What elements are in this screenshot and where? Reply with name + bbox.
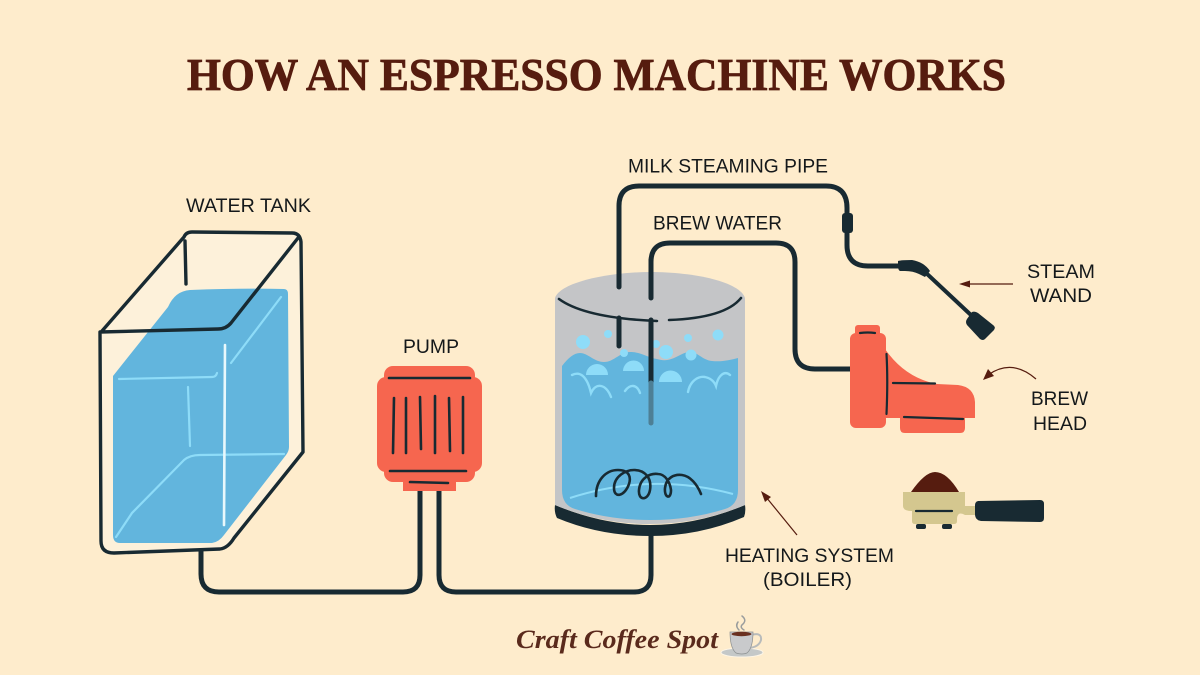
- label: steam wand: [1027, 261, 1095, 307]
- saucer: [721, 648, 763, 657]
- brew head: [850, 325, 975, 433]
- label: brew water: BREW WATER: [653, 212, 782, 234]
- icon: coffee cup: [721, 616, 763, 657]
- water floor line: [570, 484, 733, 498]
- label: heating system: [725, 545, 894, 591]
- label: heating system: HEATING SYSTEM: [725, 545, 894, 567]
- pipe connector: [842, 213, 853, 233]
- wand nozzle: [966, 312, 995, 340]
- label: steam wand: WAND: [1030, 285, 1092, 307]
- milk steaming pipe: [619, 186, 905, 288]
- label: brew head: HEAD: [1033, 413, 1087, 435]
- brew head group: [900, 416, 965, 433]
- label: steam wand: STEAM: [1027, 261, 1095, 283]
- label: milk steaming pipe: MILK STEAMING PIPE: [628, 156, 828, 178]
- arrow: steam wand: [959, 280, 1013, 288]
- basket line: [916, 510, 952, 512]
- tank water highlights: [116, 297, 284, 537]
- brew head body: [885, 349, 975, 418]
- coffee: [732, 632, 752, 636]
- handle: [975, 500, 1044, 522]
- brew head column: [850, 333, 886, 428]
- boiler water: [562, 352, 738, 520]
- pipe: pump to boiler: [439, 488, 651, 592]
- bubbles: [576, 330, 724, 382]
- boiler lid arc: [559, 298, 741, 321]
- pipe: tank to pump: [201, 488, 420, 592]
- arrow: heating system: [761, 491, 797, 535]
- water tank: [100, 232, 303, 553]
- steam: [737, 616, 745, 630]
- steam wand: [898, 260, 995, 340]
- label: water tank: WATER TANK: [186, 195, 311, 217]
- brew head lines: [860, 332, 963, 419]
- coffee grounds: [911, 472, 959, 492]
- tank outline: [100, 232, 303, 553]
- handle: [749, 634, 761, 648]
- steam swirls: [572, 373, 730, 397]
- label: pump: PUMP: [403, 336, 459, 358]
- pump: [377, 366, 482, 491]
- boiler: [555, 260, 745, 536]
- label: heating system: (BOILER): [763, 569, 852, 591]
- title: HOW AN ESPRESSO MACHINE WORKS: [187, 49, 1006, 100]
- heating coil: [596, 470, 701, 498]
- brew water pipe: [651, 243, 852, 369]
- basket: [903, 492, 977, 524]
- internal pipes: [619, 260, 651, 382]
- cup body: [730, 632, 753, 654]
- brew head cap: [855, 325, 880, 337]
- tank water: [113, 289, 289, 543]
- portafilter: [903, 472, 1044, 529]
- wand head: [898, 260, 930, 277]
- label: brew head: [1031, 388, 1089, 435]
- tank interior: [101, 232, 303, 553]
- brand logo text: Craft Coffee Spot: [516, 625, 719, 654]
- boiler body: [555, 272, 745, 524]
- pump body: [384, 366, 475, 482]
- pump lines: [389, 378, 470, 483]
- arrow: brew head: [983, 367, 1036, 380]
- feet: [916, 524, 926, 529]
- label: brew head: BREW: [1031, 388, 1089, 410]
- wand tube: [925, 272, 972, 316]
- boiler base: [555, 505, 745, 536]
